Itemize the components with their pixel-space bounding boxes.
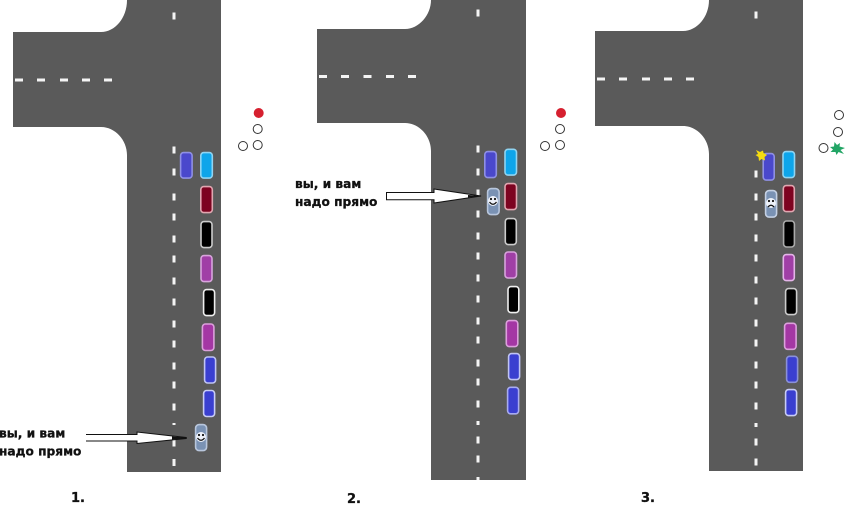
label: you need to go straight 1: надо прямо (0, 444, 81, 458)
step number 2: 2. (347, 492, 361, 507)
road: T-junction 3 (595, 0, 803, 471)
road: T-junction 1 (13, 0, 221, 472)
road markings 1 (15, 12, 174, 466)
traffic light 2 (540, 108, 566, 150)
panel: scene 2 (295, 0, 566, 507)
icon: green signal burst (830, 142, 845, 155)
road markings 2 (319, 10, 478, 480)
label: you need to go straight 2: надо прямо (295, 195, 377, 209)
your car with smiling face 1 (196, 425, 207, 451)
icon: yellow flash turn signal (756, 150, 767, 161)
label: you need to go straight 1: вы, и вам (0, 426, 65, 440)
panel: scene 3 (595, 0, 845, 506)
cars queue 2 (485, 149, 520, 414)
your car with smiling face 2 (488, 189, 499, 215)
road: T-junction 2 (317, 0, 526, 480)
arrow pointing to your car 1 (86, 432, 187, 444)
your car with sad face 3 (766, 191, 777, 217)
step number 1: 1. (71, 491, 85, 506)
cars queue 3 (763, 152, 798, 416)
cars queue 1 (181, 153, 216, 416)
traffic light 1 (238, 108, 264, 150)
panel: scene 1 (0, 0, 264, 506)
step number 3: 3. (641, 491, 655, 506)
label: you need to go straight 2: вы, и вам (295, 177, 361, 191)
traffic light 3 with green arrow burst (819, 110, 845, 155)
arrow pointing to your car 2 (386, 189, 482, 203)
road markings 3 (597, 12, 756, 466)
